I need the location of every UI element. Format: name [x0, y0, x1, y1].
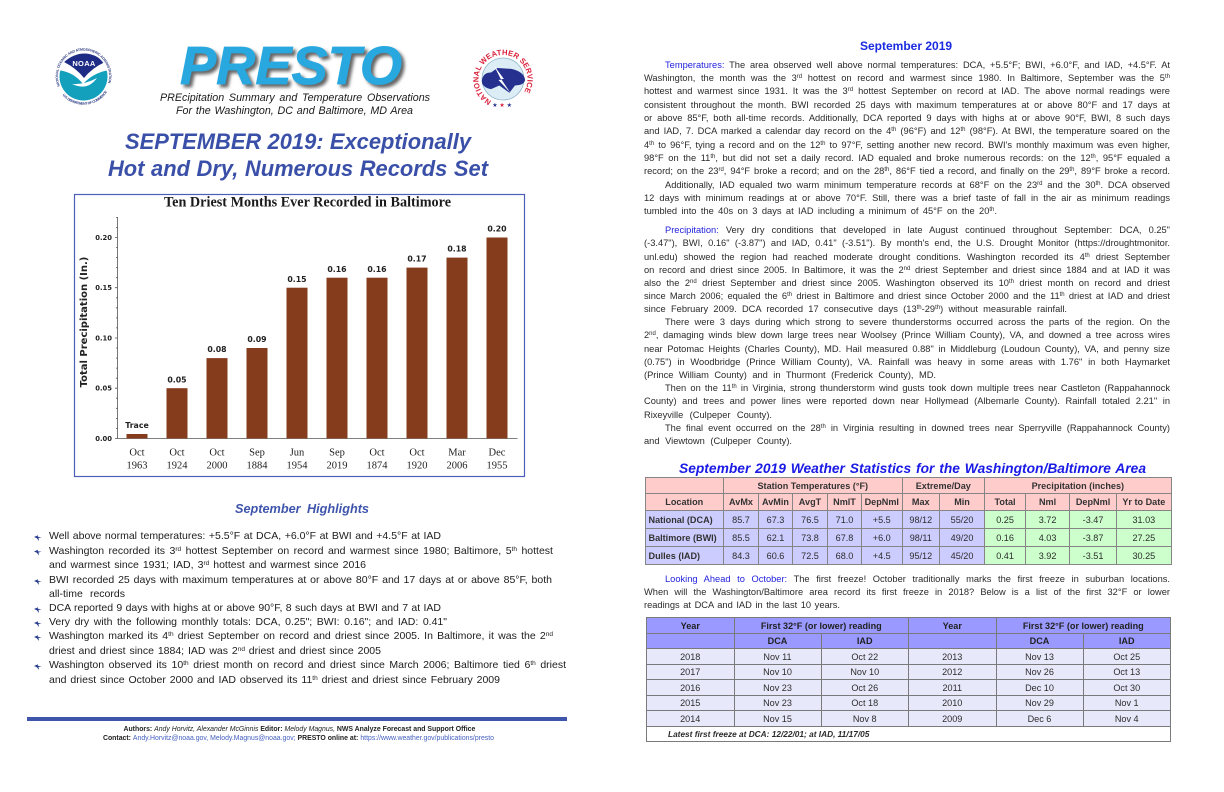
- text block: looking ahead to October: When will the Washington/Baltimore area record its first freeze in 2018? Below is a list of the first 32°F or lower: [644, 587, 1170, 597]
- footer rule: [27, 717, 567, 721]
- table: weather statistics: 85.7: [732, 514, 750, 524]
- table: first freeze dates: 2012: [942, 667, 962, 677]
- table: weather statistics: 98/11: [910, 532, 932, 542]
- bar value labels: 0.08: [207, 345, 227, 354]
- text block: temperatures: and IAD, 7. DCA marked a calendar day record on the 4th (96°F) and 12th (98°F). At BWI, the temperature soared on the: [644, 126, 1170, 136]
- table: weather statistics: 67.3: [767, 514, 784, 524]
- table: weather statistics: Total: [995, 497, 1016, 507]
- table: weather statistics: +5.5: [873, 514, 891, 524]
- table: weather statistics: 0.25: [996, 514, 1014, 524]
- table: weather statistics: Dulles (IAD): [648, 550, 700, 560]
- text block: temperatures: hottest and warmest since 1931. It was the 3rd hottest September on record at IAD. The above normal readings were: [644, 86, 1170, 96]
- table: weather statistics: AvMx: [729, 497, 753, 507]
- subtitle: [160, 92, 430, 116]
- table: weather statistics: Station Temperatures (°F): [757, 480, 868, 490]
- table: first freeze dates: Oct 18: [851, 698, 878, 708]
- table: weather statistics: 67.8: [836, 532, 853, 542]
- footer credits: Authors: Andy Horvitz, Alexander McGinnis Editor: Melody Magnus, NWS Analyze Forecast and Support Office: [124, 726, 475, 733]
- table: weather statistics: Precipitation (inches): [1032, 480, 1124, 490]
- logo: PRESTO wordmark: PRESTO: [180, 36, 402, 96]
- table: weather statistics: 76.5: [801, 514, 819, 524]
- table: first freeze dates: DCA: [1030, 636, 1049, 646]
- text block: looking ahead to October: readings at DCA and IAD in the last 10 years.: [644, 600, 840, 610]
- y axis tick labels: 0.20: [95, 234, 112, 242]
- main title: Hot and Dry, Numerous Records Set: [108, 156, 488, 181]
- table: first freeze dates: Nov 4: [1115, 714, 1139, 724]
- text block: precipitation: Then on the 11th in Virginia, strong thunderstorm wind gusts took down multiple trees near Castleton (Rappahannock: [665, 383, 1170, 393]
- table: weather statistics: 71.0: [836, 514, 853, 524]
- table: weather statistics: Yr to Date: [1122, 497, 1165, 507]
- table: weather statistics: Baltimore (BWI): [648, 532, 717, 542]
- highlights bullet list: Very dry with the following monthly totals: DCA, 0.25"; BWI: 0.16"; and IAD: 0.41": [49, 616, 447, 628]
- x axis labels: Sep: [329, 448, 345, 458]
- x axis labels: Oct: [209, 448, 225, 458]
- text block: temperatures: 12 days with minimum readings at or above 70°F. Still, there was a brief taste of fall in the air as minimum readings: [644, 192, 1170, 202]
- highlights bullet list: Washington marked its 4th driest September on record and driest since 2005. In Baltimore, it was the 2nd: [49, 630, 553, 642]
- x axis labels: 1874: [366, 460, 388, 472]
- table: weather statistics: -3.87: [1083, 532, 1103, 542]
- table: weather statistics: DepNml: [865, 497, 899, 507]
- table: first freeze dates: Nov 15: [763, 714, 792, 724]
- bar value labels: 0.17: [407, 254, 427, 264]
- x axis labels: 2006: [446, 460, 468, 472]
- table: weather statistics: 68.0: [836, 550, 853, 560]
- text block: temperatures: Additionally, IAD equaled two warm minimum temperature records at 68°F on the 23rd and the 30th. DCA observed: [665, 180, 1170, 190]
- table: weather statistics: +4.5: [873, 550, 891, 560]
- text block: temperatures: [644, 60, 1170, 216]
- text block: precipitation: [644, 225, 1170, 446]
- x axis labels: 1963: [126, 460, 148, 472]
- table: first freeze dates: Dec 6: [1028, 714, 1051, 724]
- table: weather statistics: Max: [912, 497, 930, 507]
- highlights bullet list: driest and driest since 1884; IAD was 2nd driest and driest since 2005: [49, 645, 381, 657]
- table: first freeze dates: 2017: [680, 667, 700, 677]
- highlights bullet list: all-time records: [49, 588, 125, 600]
- x axis labels: Sep: [249, 448, 265, 458]
- table: weather statistics: 30.25: [1132, 550, 1155, 560]
- table: weather statistics: 3.72: [1039, 514, 1056, 524]
- table: weather statistics: Nml: [1039, 497, 1056, 507]
- table: first freeze dates: Year: [943, 620, 962, 630]
- table: first freeze dates: Nov 29: [1025, 698, 1054, 708]
- text block: temperatures: Washington, the month was the 3rd hottest on record and warmest since 1980. In Baltimore, September was the 5th: [644, 73, 1170, 83]
- table: first freeze dates: Dec 10: [1025, 682, 1054, 692]
- table: first freeze dates: 2014: [680, 714, 700, 724]
- table: first freeze dates: Oct 30: [1113, 682, 1140, 692]
- main title: [108, 129, 489, 181]
- main title: SEPTEMBER 2019: Exceptionally: [125, 129, 471, 154]
- x axis labels: Oct: [369, 448, 385, 458]
- table: weather statistics: 0.41: [996, 550, 1014, 560]
- table: first freeze dates: IAD: [1119, 636, 1135, 646]
- table: first freeze dates: Oct 13: [1113, 667, 1140, 677]
- table: weather statistics: 60.6: [767, 550, 784, 560]
- table: first freeze dates: Nov 11: [763, 652, 792, 662]
- x axis labels: Dec: [489, 448, 506, 458]
- heading: statistics table title: September 2019 Weather Statistics for the Washington/Baltimore Area: [679, 460, 1146, 476]
- table: weather statistics: 3.92: [1039, 550, 1056, 560]
- x axis labels: 1955: [486, 460, 508, 472]
- text block: precipitation: County) and trees and power lines were reported down near Hollymead (Albemarle County). Rainfall totaled 2.21" in: [644, 396, 1170, 406]
- text block: precipitation: also the 2nd driest September and driest since 2005. Washington observed its 10th driest month on record and driest: [644, 278, 1170, 288]
- table: first freeze dates: 2015: [680, 698, 700, 708]
- bar value labels: 0.05: [167, 376, 187, 384]
- text block: temperatures: Temperatures: The area observed well above normal temperatures: DCA, +5.5°F; BWI, +6.0°F, and IAD, +4.5°F. At: [665, 60, 1170, 70]
- x axis labels: Jun: [290, 448, 305, 458]
- subtitle: For the Washington, DC and Baltimore, MD Area: [176, 104, 413, 116]
- text block: temperatures: 98°F on the 11th, but did not set a daily record. IAD equaled and broke numerous records: on the 12th, 95°F equaled a: [644, 153, 1170, 163]
- table: weather statistics: 72.5: [801, 550, 819, 560]
- table: first freeze dates: Nov 10: [850, 667, 879, 677]
- table: weather statistics: 4.03: [1039, 532, 1056, 542]
- table: first freeze dates: First 32°F (or lower) reading: [1023, 620, 1144, 630]
- table: weather statistics: [645, 477, 1172, 565]
- table: weather statistics: Min: [954, 497, 970, 507]
- table: first freeze dates: Year: [681, 620, 700, 630]
- bar value labels: Trace: [125, 421, 149, 430]
- table: first freeze dates: 2018: [680, 652, 700, 662]
- table: weather statistics: 31.03: [1132, 514, 1155, 524]
- bar value labels: 0.16: [367, 265, 387, 274]
- bar chart: ten driest months in Baltimore: [74, 194, 526, 478]
- bar value labels: [125, 224, 507, 430]
- x axis labels: 1924: [166, 460, 188, 472]
- bar value labels: 0.09: [247, 335, 267, 344]
- table: first freeze dates: 2010: [942, 698, 962, 708]
- table: weather statistics: 85.5: [732, 532, 750, 542]
- subtitle: PREcipitation Summary and Temperature Observations: [160, 92, 430, 104]
- table: weather statistics: AvMin: [762, 497, 789, 507]
- table: weather statistics: 45/20: [951, 550, 973, 560]
- highlights bullet list: [34, 530, 566, 686]
- table: weather statistics: -3.51: [1083, 550, 1103, 560]
- chart title: Ten Driest Months Ever Recorded in Baltimore: [164, 194, 451, 210]
- text block: temperatures: 4th to 96°F, tying a record and on the 12th to 97°F, setting another new record. BWI's monthly maximum was even higher,: [644, 140, 1170, 150]
- bar value labels: 0.20: [487, 224, 507, 234]
- table: first freeze dates: Nov 10: [763, 667, 792, 677]
- table: weather statistics: 95/12: [909, 550, 932, 560]
- bars: [126, 238, 508, 438]
- text block: precipitation: on record and driest since 2005. In Baltimore, it was the 2nd driest September and driest since 1884 and at IAD it was: [644, 265, 1170, 275]
- x axis labels: 1920: [406, 460, 428, 472]
- text block: precipitation: (Prince William County) and in Thurmont (Frederick County), MD.: [644, 370, 936, 380]
- axes and ticks: [115, 217, 518, 438]
- table: weather statistics: DepNml: [1076, 497, 1110, 507]
- table: weather statistics: AvgT: [799, 497, 821, 507]
- table: weather statistics: 73.8: [801, 532, 819, 542]
- y axis tick labels: 0.05: [95, 385, 112, 393]
- y axis tick labels: 0.10: [95, 334, 112, 342]
- text block: precipitation: The final event occurred on the 28th in Virginia resulting in downed trees near Sperryville (Rappahannock County): [665, 423, 1170, 433]
- table: first freeze dates: Nov 1: [1115, 698, 1139, 708]
- text block: precipitation: (-3.47"), BWI, 0.16" (-3.87") and IAD, 0.41" (-3.51"). By month's end, the U.S. Drought Monitor (https://droughtmonitor.: [644, 238, 1170, 248]
- table: first freeze dates: First 32°F (or lower) reading: [761, 620, 882, 630]
- y axis tick labels: 0.15: [95, 284, 112, 292]
- table: first freeze dates: Latest first freeze at DCA: 12/22/01; at IAD, 11/17/05: [668, 729, 869, 739]
- x axis labels: Oct: [129, 448, 145, 458]
- text block: looking ahead to October: Looking Ahead to October: The first freeze! October traditionally marks the first freeze in suburban locations.: [665, 574, 1170, 584]
- table: weather statistics: NmlT: [833, 497, 856, 507]
- text block: precipitation: and Viewtown (Culpeper County).: [644, 436, 792, 446]
- y axis tick labels: [95, 234, 112, 443]
- table: weather statistics: -3.47: [1083, 514, 1103, 524]
- footer credits: [103, 726, 494, 742]
- table: first freeze dates: IAD: [857, 636, 873, 646]
- text block: temperatures: or above 85°F, both all-time records. Additionally, DCA reported 9 days with highs at or above 90°F, BWI, 8 such days: [644, 113, 1170, 123]
- icon: NOAA logo: [56, 48, 112, 105]
- table: weather statistics: 62.1: [767, 532, 784, 542]
- text block: precipitation: There were 3 days during which strong to severe thunderstorms occurred across the parts of the region. On the: [665, 317, 1170, 327]
- heading: September Highlights: September Highlights: [235, 502, 369, 516]
- x axis labels: 2000: [206, 460, 228, 472]
- icon: NOAA logo: U.S. DEPARTMENT OF COMMERCE: [62, 90, 108, 105]
- highlights bullet list: BWI recorded 25 days with maximum temperatures at or above 80°F and 17 days at or above 85°F, both: [49, 574, 552, 586]
- x axis labels: [126, 448, 508, 472]
- heading: September 2019: September 2019: [860, 39, 952, 53]
- highlights bullet list: Washington observed its 10th driest month on record and driest since March 2006; Baltimore tied 6th driest: [49, 659, 566, 671]
- x axis labels: Oct: [409, 448, 425, 458]
- text block: precipitation: 2nd, damaging winds blew down large trees near Woolsey (Prince William County), VA, and downed a tree across wires: [644, 330, 1170, 340]
- table: first freeze dates: 2016: [680, 682, 700, 692]
- table: weather statistics: National (DCA): [648, 514, 713, 524]
- table: weather statistics: 0.16: [996, 532, 1014, 542]
- table: weather statistics: 98/12: [909, 514, 932, 524]
- highlights bullet list: DCA reported 9 days with highs at or above 90°F, 8 such days at BWI and 7 at IAD: [49, 602, 441, 614]
- bullet icons: [34, 535, 42, 670]
- icon: National Weather Service logo: ★★★: [492, 102, 514, 109]
- table: first freeze dates: Nov 8: [853, 714, 877, 724]
- x axis labels: 2019: [326, 460, 348, 472]
- x axis labels: Oct: [169, 448, 185, 458]
- table: first freeze dates: Nov 26: [1025, 667, 1054, 677]
- icon: NOAA logo: NATIONAL OCEANIC AND ATMOSPHERIC ADMINISTRATION: [56, 48, 112, 87]
- table: first freeze dates: Nov 23: [763, 698, 792, 708]
- bar value labels: 0.15: [287, 275, 307, 284]
- icon: NOAA logo: NOAA: [72, 59, 96, 68]
- highlights bullet list: Well above normal temperatures: +5.5°F at DCA, +6.0°F at BWI and +4.5°F at IAD: [49, 530, 441, 542]
- table: first freeze dates: Nov 23: [763, 682, 792, 692]
- x axis labels: 1954: [286, 460, 308, 472]
- table: weather statistics: 27.25: [1132, 532, 1155, 542]
- highlights bullet list: Washington recorded its 3rd hottest September on record and warmest since 1980; Baltimore, 5th hottest: [49, 544, 553, 556]
- table: weather statistics: 49/20: [951, 532, 973, 542]
- text block: temperatures: record; on the 23rd, 94°F broke a record; and on the 28th, 86°F tied a record, and finally on the 29th, 89°F broke a record.: [644, 166, 1170, 176]
- table: first freeze dates: 2011: [942, 682, 962, 692]
- table: weather statistics: Extreme/Day: [916, 480, 971, 490]
- text block: precipitation: since March 2006; equaled the 6th driest in Baltimore and driest since October 2000 and the 11th driest at IAD and driest: [644, 291, 1170, 301]
- table: first freeze dates: Oct 25: [1113, 652, 1140, 662]
- y axis title: Total Precipitation (In.): [79, 257, 90, 387]
- bar value labels: 0.16: [327, 265, 347, 274]
- table: weather statistics: Location: [665, 497, 703, 507]
- text block: temperatures: tumbled into the 40s on 3 days at IAD including a minimum of 45°F on the 20th.: [644, 206, 997, 216]
- text block: temperatures: consistent throughout the month. BWI recorded 25 days with maximum temperatures at or above 80°F and 17 days at: [644, 100, 1170, 110]
- text block: precipitation: Precipitation: Very dry conditions that developed in late August continued throughout September: DCA, 0.25": [665, 225, 1170, 235]
- table: first freeze dates: Nov 13: [1025, 652, 1054, 662]
- table: first freeze dates: [646, 617, 1171, 742]
- bar value labels: 0.18: [447, 244, 467, 254]
- highlights bullet list: and driest since October 2000 and IAD observed its 11th driest and driest since February 2009: [49, 674, 500, 686]
- table: first freeze dates: Oct 26: [851, 682, 878, 692]
- y axis tick labels: 0.00: [95, 435, 112, 443]
- table: weather statistics: +6.0: [873, 532, 891, 542]
- text block: precipitation: near Potomac Heights (Charles County), MD. Hail measured 0.88" in Middleburg (Loudoun County), VA, and penny size: [644, 344, 1170, 354]
- icon: National Weather Service logo: NATIONAL WEATHER SERVICE: [473, 50, 533, 106]
- table: first freeze dates: 2013: [942, 652, 962, 662]
- text block: precipitation: Rixeyville (Culpeper County).: [644, 410, 772, 420]
- table: weather statistics: 55/20: [951, 514, 973, 524]
- text block: precipitation: (0.75") in Woodbridge (Prince William County), VA. Rainfall was heavy in some areas with 1.76" in both Haymarket: [644, 357, 1170, 367]
- table: first freeze dates: DCA: [768, 636, 787, 646]
- table: weather statistics: 84.3: [732, 550, 750, 560]
- footer credits: Contact: Andy.Horvitz@noaa.gov, Melody.Magnus@noaa.gov; PRESTO online at: https://www.weather.gov/publications/presto: [103, 734, 494, 742]
- table: first freeze dates: 2009: [942, 714, 962, 724]
- highlights bullet list: and warmest since 1931; IAD, 3rd hottest and warmest since 2016: [49, 559, 366, 571]
- x axis labels: Mar: [448, 448, 466, 458]
- table: first freeze dates: Oct 22: [851, 652, 878, 662]
- x axis labels: 1884: [246, 460, 268, 472]
- text block: precipitation: unl.edu) showed the region had reached moderate drought conditions. Washington recorded its 4th driest September: [644, 252, 1170, 262]
- text block: looking ahead to October: [644, 574, 1170, 610]
- text block: precipitation: since February 2009. DCA recorded 17 consecutive days (13th-29th) without measurable rainfall.: [644, 304, 1067, 314]
